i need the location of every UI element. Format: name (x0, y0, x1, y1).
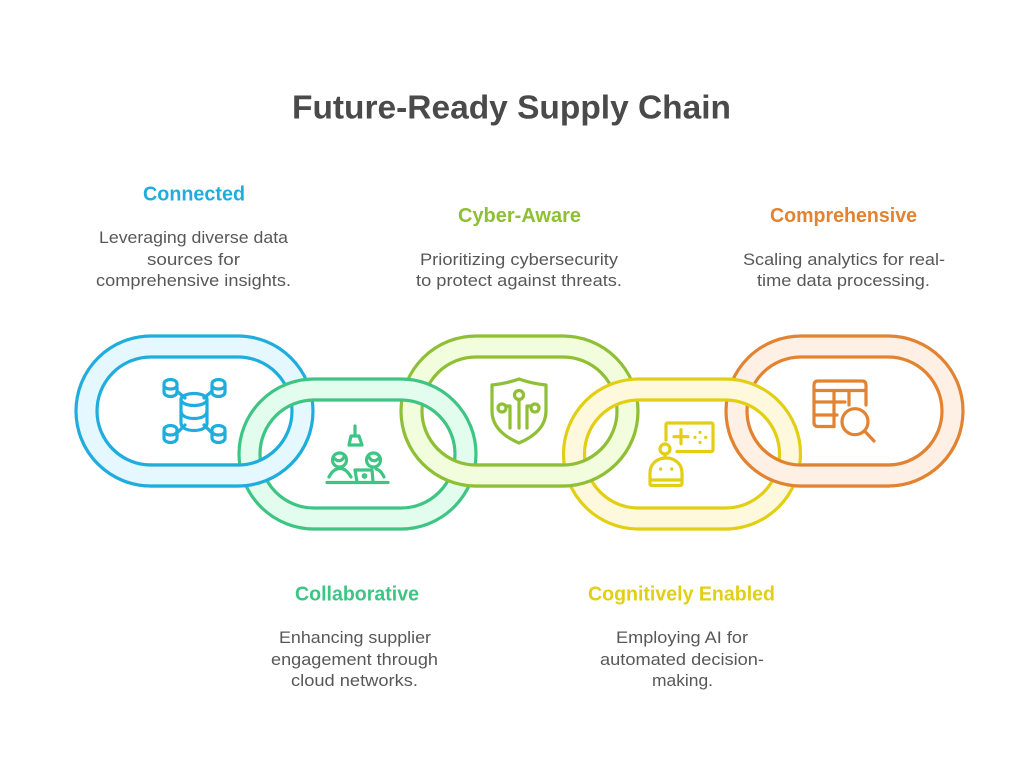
label: Comprehensive: Comprehensive (770, 205, 917, 227)
label: Cyber-Aware: Cyber-Aware (458, 205, 581, 227)
icon: table with magnifier (814, 381, 874, 441)
label: Cyber-Aware: Prioritizing cybersecurity (420, 250, 619, 269)
chain link: Collaborative (239, 379, 476, 529)
label: Collaborative: cloud networks. (291, 671, 418, 690)
label: Connected (96, 184, 291, 290)
chain link: Connected (76, 336, 313, 486)
chain link: Cyber-Aware (401, 336, 638, 486)
label: Cognitively Enabled: automated decision- (600, 650, 764, 669)
label: Collaborative: engagement through (271, 650, 438, 669)
icon: collaborating people (327, 426, 388, 482)
label: Connected: Connected (143, 184, 245, 206)
label: Collaborative: Enhancing supplier (279, 628, 431, 647)
label: Cognitively Enabled (588, 584, 775, 690)
label: Collaborative (271, 584, 438, 690)
icon: circuit shield (492, 379, 546, 443)
label: Cognitively Enabled: Cognitively Enabled (588, 584, 775, 606)
chain link: Comprehensive (726, 336, 963, 486)
label: Cyber-Aware (416, 205, 622, 290)
label: Comprehensive (743, 205, 945, 290)
label: Comprehensive: Scaling analytics for real- (743, 250, 945, 269)
icon: robot and game controller (650, 423, 713, 486)
label: Cyber-Aware: to protect against threats. (416, 271, 622, 290)
label: Connected: comprehensive insights. (96, 271, 291, 290)
icon: connected databases (164, 380, 225, 442)
label: Cognitively Enabled: making. (652, 671, 713, 690)
chain link: Cognitively Enabled (564, 379, 800, 529)
label: Comprehensive: time data processing. (757, 271, 930, 290)
label: Cognitively Enabled: Employing AI for (616, 628, 748, 647)
label: Connected: sources for (147, 250, 240, 269)
label: Collaborative: Collaborative (295, 584, 419, 606)
title: Future-Ready Supply Chain (292, 88, 731, 126)
label: Connected: Leveraging diverse data (99, 228, 289, 247)
